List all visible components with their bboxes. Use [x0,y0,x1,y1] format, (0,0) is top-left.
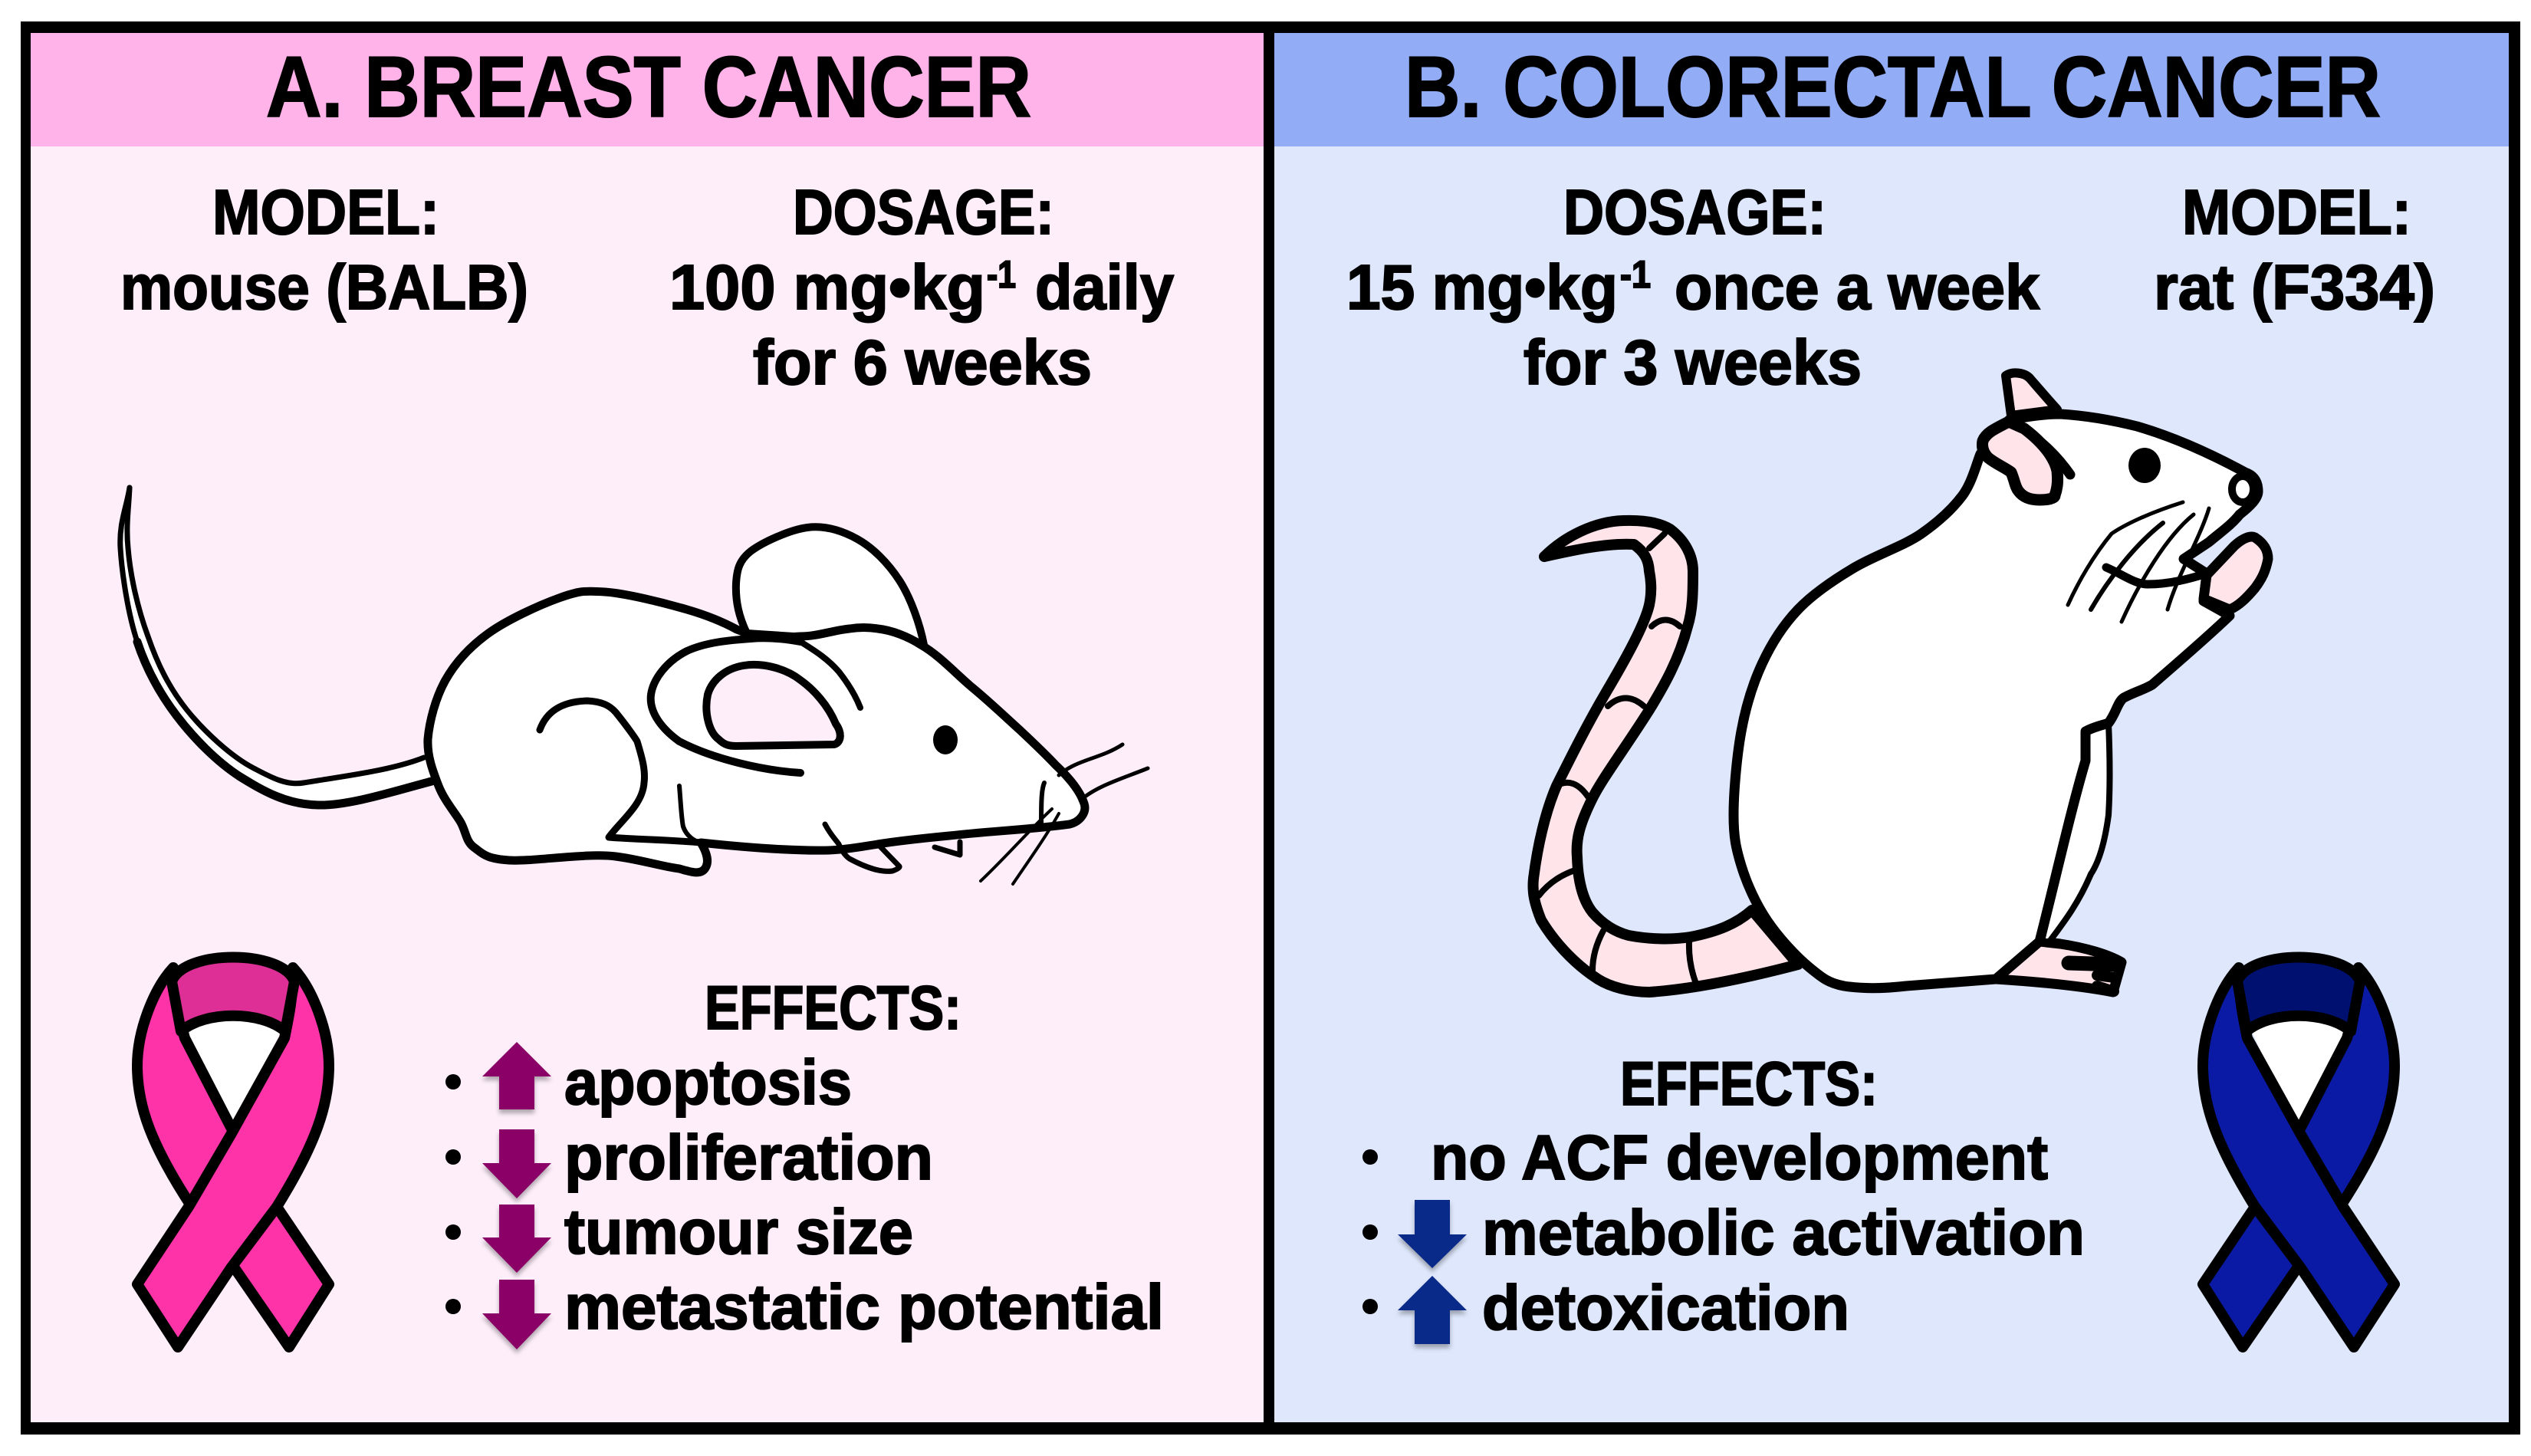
rat tail [1533,521,1798,992]
model block B: rat (F334) [2154,251,2435,323]
pink ribbon [137,957,329,1347]
mouse body [428,591,1085,873]
effect: detoxication up: detoxication [1482,1272,1849,1343]
mouse illustration [120,488,1148,884]
dosage block B: once a week [1675,251,2040,323]
dosage block B: -1 [1620,253,1651,296]
rat rear leg [2042,723,2110,942]
rat body [1734,414,2258,988]
dosage block A: -1 [987,253,1016,296]
model block A [120,176,528,323]
mouse nose and whiskers [981,744,1148,884]
rat top ear [2006,373,2057,416]
dosage block B: for 3 weeks [1524,327,1862,398]
effects list A [445,974,1164,1349]
model block B [2154,176,2435,323]
mouse front legs [679,786,899,871]
mouse hind leg [540,701,701,843]
panel B: colorectal cancer [1274,33,2509,1422]
header band A [31,33,1264,146]
effect: no ACF development: no ACF development [1431,1122,2048,1193]
mouse tail [120,488,432,805]
mouse front ear [651,638,860,773]
header band B [1274,33,2509,146]
rat foot [1996,942,2122,992]
rat side ear [1982,422,2058,500]
effect: metastatic potential down: metastatic potential [564,1271,1164,1343]
dosage block A: daily [1035,251,1174,323]
dosage block B: 15 mg•kg [1346,251,1618,323]
blue ribbon [2203,957,2395,1347]
effect: tumour size down: tumour size [564,1196,913,1267]
model block B: MODEL: [2182,176,2411,248]
rat mouth and whiskers [2068,502,2209,622]
dosage block B: DOSAGE: [1563,176,1826,248]
model block A: mouse (BALB) [120,251,528,323]
dosage block A: for 6 weeks [753,327,1092,398]
dosage block A: 100 mg•kg [669,251,985,323]
panel A: breast cancer [31,33,1264,1422]
mouse eye [933,725,958,754]
effects list A: EFFECTS: [705,974,961,1043]
dosage block A [669,176,1174,398]
rat paw [2204,537,2268,610]
effects list B [1362,1050,2085,1344]
mouse back ear [736,527,924,645]
rat eye [2128,448,2161,483]
effect: metabolic activation down: metabolic activation [1482,1197,2085,1268]
rat nose [2232,476,2253,502]
rat illustration [1533,373,2268,992]
dosage block A: DOSAGE: [793,176,1054,248]
model block A: MODEL: [212,176,439,248]
effect: proliferation down: proliferation [564,1122,933,1193]
effect: tumour size down [445,1196,913,1273]
effect: apoptosis up: apoptosis [564,1047,852,1118]
heading A: A. BREAST CANCER [266,39,1031,135]
effect: apoptosis up [445,1042,852,1118]
effects list B: EFFECTS: [1620,1050,1878,1119]
heading B: B. COLORECTAL CANCER [1405,39,2381,135]
dosage block B [1346,176,2040,398]
